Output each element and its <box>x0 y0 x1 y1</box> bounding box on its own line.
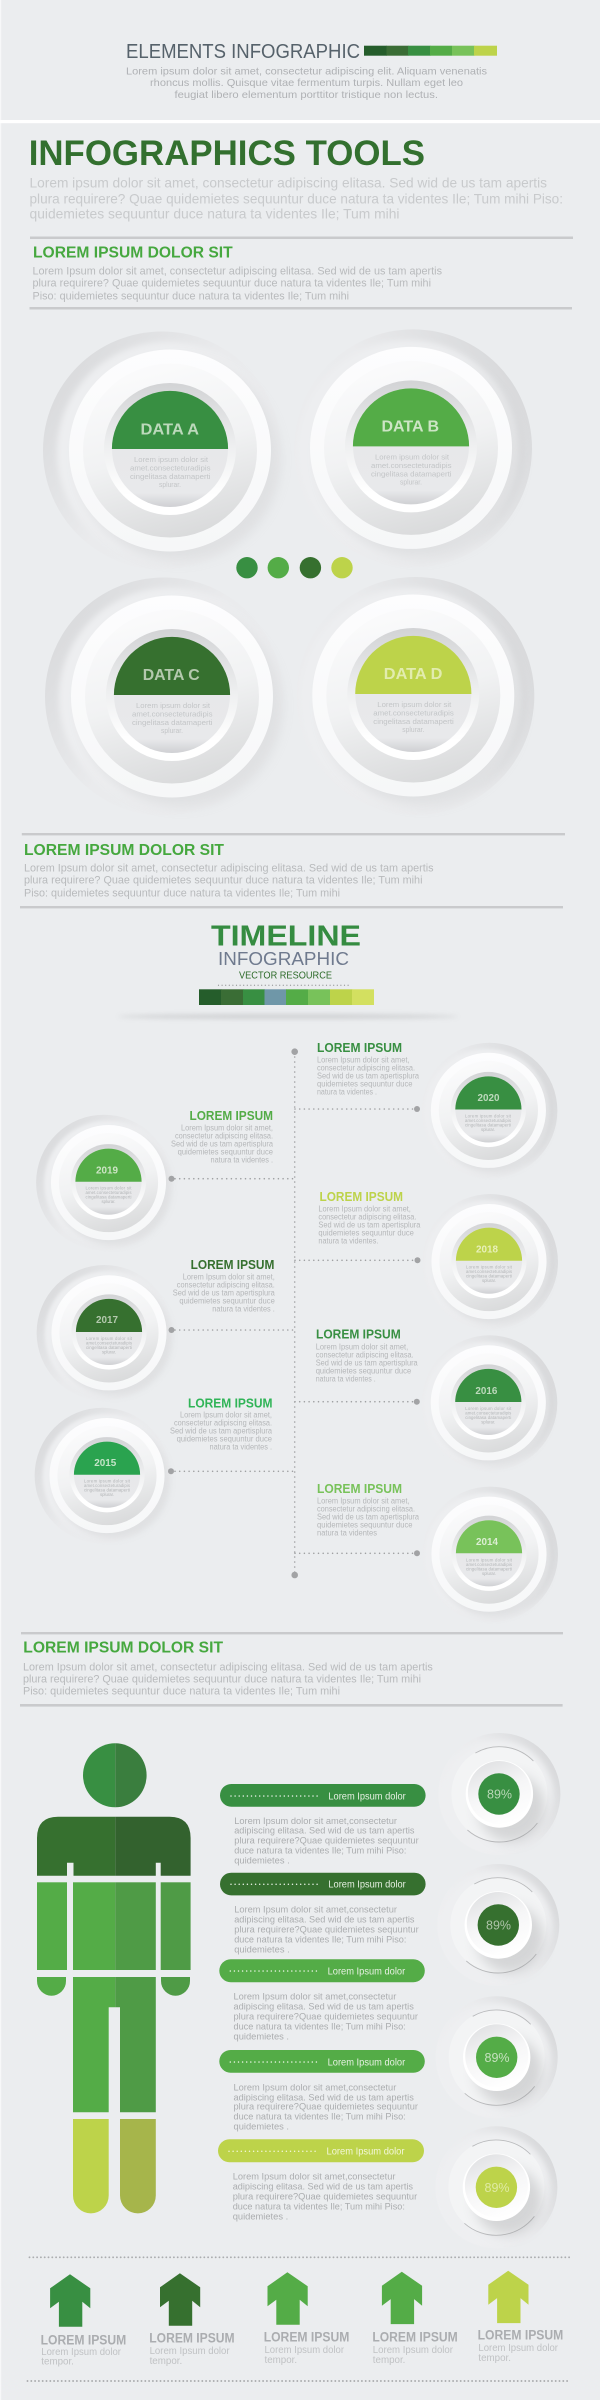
text section 2: Lorem Ipsum dolor sit amet, consectetur adipiscing elitasa. Sed wid de us tam apertis <box>24 863 434 875</box>
timeline item 2017: amet.consecteturadipis <box>86 1340 132 1346</box>
percent dial 1 <box>438 1733 560 1855</box>
circle: data B <box>294 329 532 567</box>
timeline item 2019: cingelitasa datamaperti <box>86 1195 132 1200</box>
circle: data D: amet.consecteturadipis <box>373 708 454 717</box>
list item 1: Lorem Ipsum dolor sit amet,consectetur <box>234 1816 398 1827</box>
circle: data C: cingelitasa datamaperti <box>132 718 213 727</box>
timeline item 2015 <box>35 1396 295 1543</box>
timeline item 2016: quidemietes sequuntur duce <box>316 1367 412 1376</box>
timeline item 2015: Sed wid de us tam apertisplura <box>170 1427 273 1436</box>
timeline item 2017: quidemietes sequuntur duce <box>179 1297 275 1306</box>
timeline item 2019: LOREM IPSUM <box>190 1109 273 1123</box>
timeline item 2015: Lorem ipsum dolor sit <box>84 1479 131 1484</box>
timeline heading <box>199 921 374 1005</box>
list item 4: quidemietes . <box>234 2121 289 2132</box>
list item 1: quidemietes . <box>234 1855 290 1866</box>
figure head <box>83 1743 147 1807</box>
percent dial 2: 89% <box>486 1918 511 1932</box>
timeline item 2019: amet.consecteturadipis <box>86 1190 132 1195</box>
timeline item 2018: LOREM IPSUM <box>320 1190 403 1204</box>
circle: data D <box>296 577 534 815</box>
arrow column 1: tempor. <box>41 2356 74 2368</box>
timeline heading: TIMELINE <box>211 921 361 953</box>
circle: data B: Lorem ipsum dolor sit <box>375 452 449 461</box>
circle: data D: Lorem ipsum dolor sit <box>377 700 451 709</box>
timeline item 2017: consectetur adipiscing elitasa. <box>177 1281 275 1290</box>
list item 4: adipiscing elitasa. Sed wid de us tam apertis <box>234 2092 414 2103</box>
timeline item 2015: cingelitasa datamaperti <box>84 1488 130 1493</box>
timeline item 2015: LOREM IPSUM <box>188 1396 272 1410</box>
circle: data B: amet.consecteturadipis <box>371 461 452 470</box>
list item 1: adipiscing elitasa. Sed wid de us tam apertis <box>234 1825 415 1836</box>
timeline item 2018: Lorem ipsum dolor sit <box>466 1265 513 1270</box>
list item 3: Lorem Ipsum dolor sit amet,consectetur <box>234 1991 397 2002</box>
arrow column 2: Lorem Ipsum dolor <box>150 2345 230 2357</box>
timeline item 2016: Lorem ipsum dolor sit <box>465 1406 512 1411</box>
arrow column 5: LOREM IPSUM <box>478 2327 563 2342</box>
list item 4 <box>219 2050 425 2132</box>
timeline item 2016 <box>295 1328 557 1471</box>
list item 1: plura requirere?Quae quidemietes sequuntur <box>234 1835 419 1846</box>
timeline item 2017: splurar. <box>102 1350 116 1354</box>
arrow column 4: tempor. <box>373 2354 405 2366</box>
list item 3: quidemietes . <box>234 2031 289 2042</box>
timeline heading: VECTOR RESOURCE <box>239 969 332 981</box>
arrow column 1: LOREM IPSUM <box>41 2332 126 2347</box>
percent dial 2 <box>437 1864 559 1986</box>
list item 3: plura requirere?Quae quidemietes sequuntur <box>234 2011 419 2022</box>
timeline item 2019: splurar. <box>102 1199 116 1204</box>
timeline heading: INFOGRAPHIC <box>218 949 349 969</box>
timeline item 2019: quidemietes sequuntur duce <box>178 1148 274 1157</box>
icon: arrow 5 <box>488 2271 528 2323</box>
colour dots <box>236 557 353 578</box>
arrow column 1 <box>41 2274 126 2368</box>
timeline item 2019 <box>36 1109 295 1250</box>
percent dial 3 <box>436 1996 558 2118</box>
arrow column 5 <box>478 2271 563 2364</box>
timeline item 2019: consectetur adipiscing elitasa. <box>175 1132 273 1141</box>
arrow column 3 <box>264 2272 349 2366</box>
circle: data C: DATA C <box>143 667 200 684</box>
timeline item 2016: LOREM IPSUM <box>316 1328 401 1342</box>
timeline item 2018: cingelitasa datamaperti <box>466 1274 512 1279</box>
timeline item 2020: Sed wid de us tam apertisplura <box>317 1072 420 1081</box>
timeline colour bar <box>199 989 374 1005</box>
text section 1 <box>30 236 573 310</box>
timeline item 2019: Sed wid de us tam apertisplura <box>171 1140 274 1149</box>
circle: data B: cingelitasa datamaperti <box>371 469 452 478</box>
timeline item 2014: consectetur adipiscing elitasa. <box>317 1505 415 1514</box>
timeline item 2016: splurar. <box>481 1420 495 1424</box>
timeline item 2020: splurar. <box>481 1127 495 1132</box>
list item 5: adipiscing elitasa. Sed wid de us tam apertis <box>233 2181 413 2192</box>
list item 3: adipiscing elitasa. Sed wid de us tam apertis <box>234 2001 414 2012</box>
timeline item 2014: Lorem Ipsum dolor sit amet, <box>317 1497 410 1506</box>
timeline item 2016: cingelitasa datamaperti <box>465 1415 511 1420</box>
timeline item 2020: Lorem Ipsum dolor sit amet, <box>317 1056 410 1065</box>
timeline item 2017: 2017 <box>96 1314 118 1326</box>
main title: INFOGRAPHICS TOOLS <box>29 134 425 173</box>
timeline item 2018: quidemietes sequuntur duce <box>318 1229 414 1238</box>
timeline item 2017 <box>37 1258 295 1401</box>
list item 4: duce natura ta videntes Ile; Tum mihi Piso: <box>234 2111 406 2122</box>
header description: Lorem ipsum dolor sit amet, consectetur adipiscing elit. Aliquam venenatis <box>126 65 487 77</box>
intro paragraph: quidemietes sequuntur duce natura ta videntes Ile; Tum mihi <box>30 206 400 222</box>
list item 1 <box>220 1784 426 1866</box>
timeline item 2015: splurar. <box>100 1492 114 1497</box>
text section 2: plura requirere? Quae quidemietes sequuntur duce natura ta videntes Ile; Tum mihi <box>24 875 422 887</box>
header title: ELEMENTS INFOGRAPHIC <box>126 41 360 63</box>
timeline item 2020 <box>295 1041 557 1178</box>
circle: data A: cingelitasa datamaperti <box>130 472 211 481</box>
circle: data D: cingelitasa datamaperti <box>373 717 454 726</box>
intro paragraph: Lorem ipsum dolor sit amet, consectetur adipiscing elitasa. Sed wid de us tam apertis <box>30 175 547 191</box>
percent dial 4: 89% <box>484 2181 510 2195</box>
circle: data C <box>45 578 283 816</box>
timeline item 2019: Lorem Ipsum dolor sit amet, <box>181 1124 273 1133</box>
timeline item 2018: consectetur adipiscing elitasa. <box>318 1213 416 1222</box>
arrow column 2: LOREM IPSUM <box>149 2330 235 2345</box>
timeline item 2016: Sed wid de us tam apertisplura <box>316 1359 418 1368</box>
list item 3 <box>219 1959 425 2042</box>
human figure <box>37 1743 191 2213</box>
text section 1: LOREM IPSUM DOLOR SIT <box>33 244 233 261</box>
text section 3: LOREM IPSUM DOLOR SIT <box>23 1639 223 1656</box>
timeline item 2015: consectetur adipiscing elitasa. <box>174 1419 272 1428</box>
timeline item 2017: Lorem ipsum dolor sit <box>86 1336 133 1341</box>
list item 1: Lorem Ipsum dolor <box>328 1792 406 1802</box>
arrow column 3: LOREM IPSUM <box>264 2329 349 2344</box>
timeline item 2014: Lorem ipsum dolor sit <box>466 1557 513 1562</box>
list item 4: Lorem Ipsum dolor sit amet,consectetur <box>234 2082 397 2093</box>
text section 3: Lorem Ipsum dolor sit amet, consectetur adipiscing elitasa. Sed wid de us tam apertis <box>23 1662 433 1674</box>
timeline item 2016: consectetur adipiscing elitasa. <box>316 1351 414 1360</box>
circle: data A: DATA A <box>140 421 199 438</box>
arrow column 4: LOREM IPSUM <box>372 2329 458 2344</box>
icon: arrow 4 <box>382 2272 422 2324</box>
list item 3: Lorem Ipsum dolor <box>328 1966 406 1978</box>
timeline item 2014: quidemietes sequuntur duce <box>317 1521 413 1530</box>
text section 1: plura requirere? Quae quidemietes sequuntur duce natura ta videntes Ile; Tum mihi <box>32 278 431 290</box>
arrow column 1: Lorem Ipsum dolor <box>41 2346 121 2358</box>
list item 5: quidemietes . <box>233 2211 288 2222</box>
timeline item 2019: 2019 <box>96 1164 118 1176</box>
timeline item 2016: amet.consecteturadipis <box>465 1410 511 1416</box>
timeline item 2016: 2016 <box>475 1385 498 1397</box>
timeline item 2018: amet.consecteturadipis <box>466 1269 512 1274</box>
text section 2: Piso: quidemietes sequuntur duce natura ta videntes Ile; Tum mihi <box>24 888 340 900</box>
circle: data C: splurar. <box>161 726 183 735</box>
arrow column 2 <box>149 2273 235 2367</box>
timeline item 2017: cingelitasa datamaperti <box>86 1345 132 1350</box>
list item 4: plura requirere?Quae quidemietes sequuntur <box>234 2101 419 2112</box>
timeline item 2014: natura ta videntes <box>317 1529 377 1538</box>
timeline item 2015: Lorem Ipsum dolor sit amet, <box>180 1411 272 1420</box>
timeline item 2016: Lorem Ipsum dolor sit amet, <box>316 1343 408 1352</box>
arrow column 5: tempor. <box>478 2352 511 2364</box>
header: elements infographic <box>126 41 497 101</box>
timeline item 2017: LOREM IPSUM <box>191 1258 274 1272</box>
arrow column 5: Lorem Ipsum dolor <box>478 2342 558 2354</box>
timeline item 2020: cingelitasa datamaperti <box>465 1122 511 1128</box>
timeline item 2017: natura ta videntes . <box>212 1305 275 1314</box>
circle: data B: splurar. <box>400 477 422 486</box>
percent dial 3: 89% <box>484 2051 510 2065</box>
timeline item 2014: splurar. <box>482 1571 496 1576</box>
text section 2: LOREM IPSUM DOLOR SIT <box>24 842 224 859</box>
icon: arrow 3 <box>268 2272 308 2325</box>
arrow column 4: Lorem Ipsum dolor <box>373 2344 453 2356</box>
list item 4: Lorem Ipsum dolor <box>328 2058 406 2068</box>
header description <box>126 65 487 101</box>
timeline item 2015: amet.consecteturadipis <box>84 1483 130 1488</box>
text section 3: Piso: quidemietes sequuntur duce natura ta videntes Ile; Tum mihi <box>23 1686 340 1698</box>
header colour bar <box>364 46 497 56</box>
icon: arrow 2 <box>160 2273 200 2326</box>
timeline item 2014: LOREM IPSUM <box>317 1482 402 1496</box>
list item 2: duce natura ta videntes Ile; Tum mihi Piso: <box>234 1934 406 1945</box>
text section 3: plura requirere? Quae quidemietes sequuntur duce natura ta videntes Ile; Tum mihi <box>23 1674 421 1686</box>
timeline item 2020: LOREM IPSUM <box>317 1041 402 1055</box>
list item 5: plura requirere?Quae quidemietes sequuntur <box>233 2191 418 2202</box>
list item 5: Lorem Ipsum dolor <box>326 2146 405 2158</box>
figure hands <box>37 1977 190 1996</box>
timeline item 2014: amet.consecteturadipis <box>466 1562 512 1567</box>
timeline item 2015: 2015 <box>94 1457 116 1469</box>
timeline item 2020: amet.consecteturadipis <box>465 1118 511 1123</box>
list item 1: duce natura ta videntes Ile; Tum mihi Piso: <box>234 1845 406 1856</box>
list item 2: quidemietes . <box>234 1944 290 1955</box>
circle: data A: Lorem ipsum dolor sit <box>134 455 208 464</box>
list item 2: Lorem Ipsum dolor <box>328 1880 406 1890</box>
timeline item 2017: Lorem Ipsum dolor sit amet, <box>183 1273 275 1282</box>
circle: data C: amet.consecteturadipis <box>132 709 213 718</box>
timeline item 2017: Sed wid de us tam apertisplura <box>173 1289 275 1298</box>
timeline item 2020: natura ta videntes . <box>317 1088 377 1097</box>
percent dial 1: 89% <box>487 1788 512 1802</box>
circle: data A: amet.consecteturadipis <box>130 463 211 472</box>
timeline item 2018: natura ta videntes. <box>318 1237 378 1246</box>
list item 5 <box>218 2139 424 2222</box>
circle: data D: DATA D <box>384 666 442 683</box>
header description: feugiat libero elementum porttitor tristique non lectus. <box>174 89 438 101</box>
timeline axis <box>291 1048 298 1578</box>
text section 1: Lorem Ipsum dolor sit amet, consectetur adipiscing elitasa. Sed wid de us tam apertis <box>32 266 442 278</box>
timeline item 2015: natura ta videntes . <box>210 1443 272 1452</box>
timeline item 2019: natura ta videntes . <box>210 1156 273 1165</box>
timeline item 2018: Lorem Ipsum dolor sit amet, <box>318 1205 411 1214</box>
timeline item 2020: 2020 <box>478 1092 500 1104</box>
circle: data C: Lorem ipsum dolor sit <box>136 701 210 710</box>
timeline item 2018: Sed wid de us tam apertisplura <box>318 1221 421 1230</box>
figure lower legs <box>73 2119 156 2213</box>
timeline item 2016: natura ta videntes . <box>316 1375 376 1384</box>
timeline item 2015: quidemietes sequuntur duce <box>177 1435 273 1444</box>
arrow column 4 <box>372 2272 458 2366</box>
icon: arrow 1 <box>50 2274 90 2327</box>
figure upper legs <box>73 1977 156 2112</box>
list item 2: plura requirere?Quae quidemietes sequuntur <box>234 1924 419 1935</box>
intro paragraph: plura requirere? Quae quidemietes sequuntur duce natura ta videntes Ile; Tum mihi Piso: <box>30 191 563 207</box>
timeline item 2020: consectetur adipiscing elitasa. <box>317 1064 415 1073</box>
circle: data B: DATA B <box>382 419 439 436</box>
percent dial 4 <box>435 2126 557 2248</box>
circle: data D: splurar. <box>402 725 424 734</box>
list item 2: adipiscing elitasa. Sed wid de us tam apertis <box>234 1914 415 1925</box>
arrow column 3: Lorem Ipsum dolor <box>264 2344 344 2356</box>
timeline item 2019: Lorem ipsum dolor sit <box>86 1186 132 1191</box>
header description: rhoncus mollis. Quisque vitae fermentum turpis. Nullam eget leo <box>150 77 463 89</box>
timeline item 2020: Lorem ipsum dolor sit <box>465 1114 512 1118</box>
figure shoulders <box>37 1817 191 1876</box>
arrow column 3: tempor. <box>264 2354 297 2366</box>
text section 3 <box>20 1632 563 1707</box>
timeline item 2020: quidemietes sequuntur duce <box>317 1080 413 1089</box>
arrow column 2: tempor. <box>150 2355 182 2367</box>
text section 1: Piso: quidemietes sequuntur duce natura ta videntes Ile; Tum mihi <box>32 291 349 303</box>
timeline item 2014: Sed wid de us tam apertisplura <box>317 1513 420 1522</box>
timeline item 2018: 2018 <box>476 1243 498 1255</box>
text section 2 <box>20 833 565 908</box>
list item 2: Lorem Ipsum dolor sit amet,consectetur <box>234 1904 398 1915</box>
figure torso and arms <box>37 1882 191 1970</box>
timeline item 2014: 2014 <box>476 1536 498 1548</box>
timeline item 2018: splurar. <box>482 1278 496 1283</box>
timeline item 2014: cingelitasa datamaperti <box>466 1566 512 1571</box>
circle: data A <box>43 332 281 570</box>
timeline item 2018 <box>295 1190 558 1330</box>
circle: data A: splurar. <box>159 480 181 489</box>
list item 3: duce natura ta videntes Ile; Tum mihi Piso: <box>234 2021 406 2032</box>
list item 5: duce natura ta videntes Ile; Tum mihi Piso: <box>233 2201 405 2212</box>
list item 2 <box>220 1873 426 1955</box>
list item 5: Lorem Ipsum dolor sit amet,consectetur <box>233 2171 396 2182</box>
intro paragraph <box>30 175 563 222</box>
timeline item 2014 <box>295 1482 558 1622</box>
